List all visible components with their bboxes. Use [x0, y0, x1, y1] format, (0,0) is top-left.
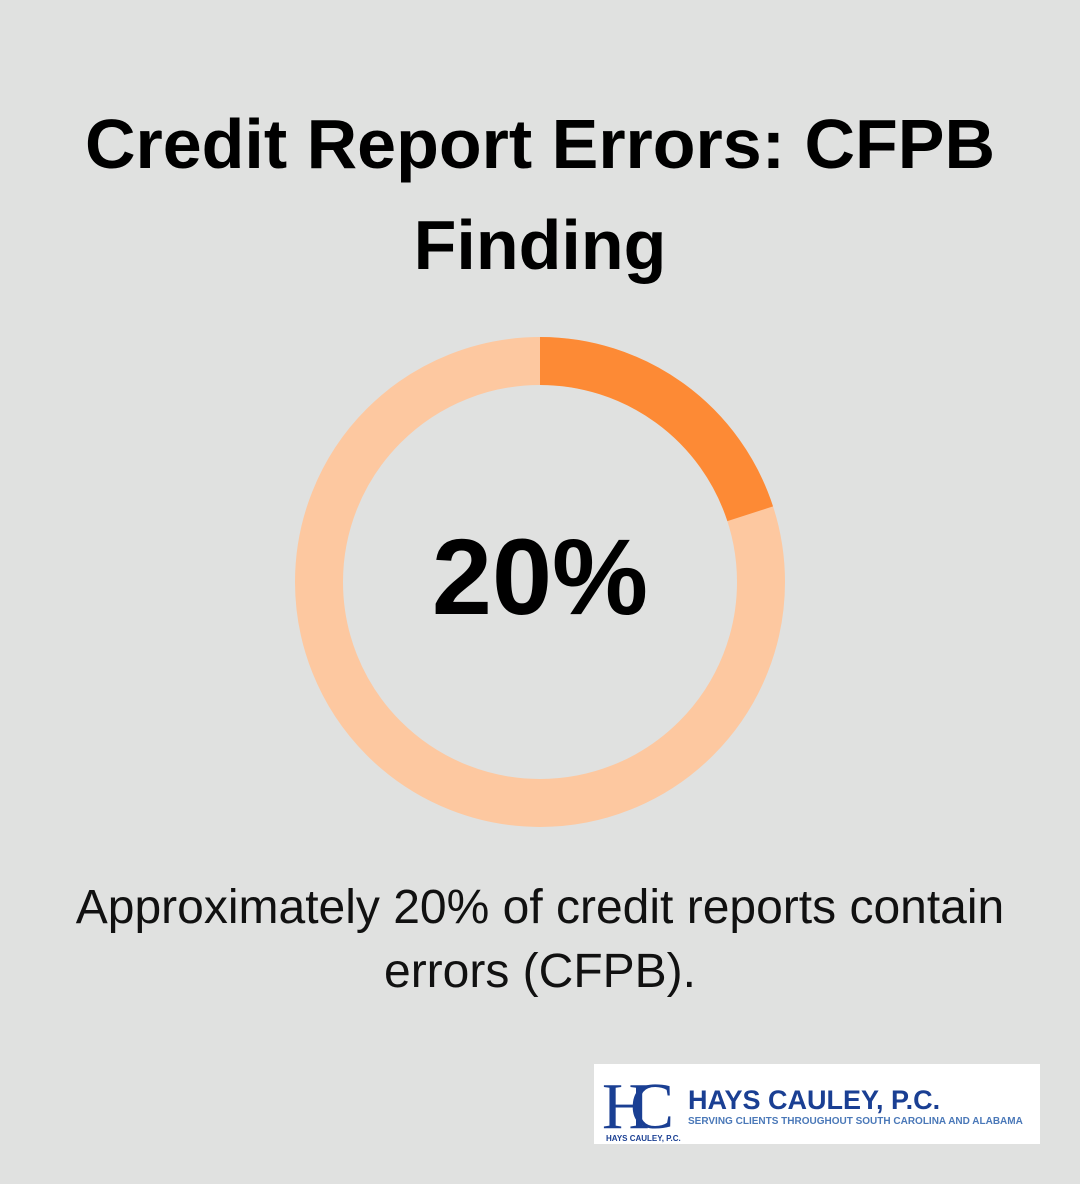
body text: Approximately 20% of credit reports contain [76, 881, 1004, 934]
logo [594, 1064, 1040, 1144]
body text: errors (CFPB). [384, 945, 696, 998]
title [85, 105, 995, 284]
logo: HAYS CAULEY, P.C. [606, 1134, 681, 1143]
title: Credit Report Errors: CFPB [85, 105, 995, 183]
logo: C [630, 1070, 674, 1143]
logo: HAYS CAULEY, P.C. [688, 1085, 940, 1115]
donut chart: 20% [432, 516, 648, 637]
title: Finding [414, 206, 666, 284]
logo: H [602, 1070, 650, 1143]
body text [76, 881, 1004, 998]
logo: SERVING CLIENTS THROUGHOUT SOUTH CAROLINA AND ALABAMA [688, 1116, 1023, 1127]
